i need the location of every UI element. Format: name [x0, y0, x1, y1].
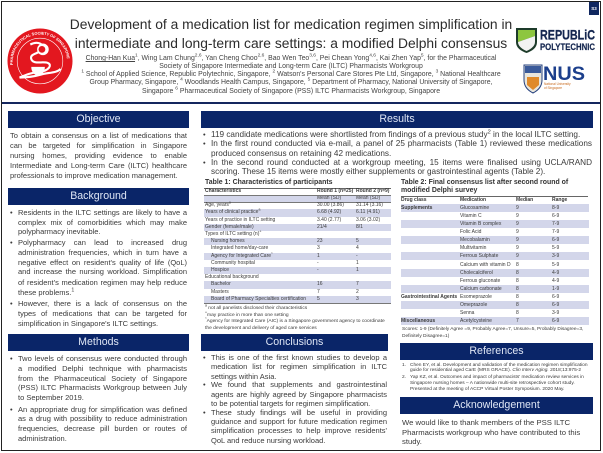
acknowledgement text: study. — [402, 437, 422, 446]
heading: background: Background — [70, 190, 127, 202]
table 1: characteristics of participants: 31.14 (3.16) — [356, 202, 383, 208]
objective text — [10, 131, 187, 180]
table 1: characteristics of participants: 3 — [356, 296, 359, 302]
conclusions bullets: simplification processes to help improve residents' — [211, 426, 387, 435]
table 2: final consensus list: Omeprazole — [460, 302, 487, 308]
table 2: final consensus list: Ferrous Sulphate — [460, 253, 498, 259]
table 2: final consensus list: 9 — [516, 237, 519, 243]
table 1: characteristics of participants: 6.68 (4.92) — [317, 209, 341, 215]
table 1: characteristics of participants: 4 — [356, 245, 359, 251]
panel: results — [201, 111, 593, 176]
panel: results: • — [203, 130, 206, 139]
conclusions bullets: guidance and support for future medication regimen — [211, 417, 387, 426]
table 2: final consensus list: Calcium carbonate — [460, 286, 502, 292]
heading: methods — [8, 334, 189, 350]
table 2: final consensus list: Gastrointestinal Agents — [401, 294, 457, 300]
table 1: characteristics of participants: Age, yearsa — [205, 201, 231, 208]
table 2: final consensus list: 6-9 — [552, 237, 559, 243]
table 1: characteristics of participants: Years of clinical practicea — [205, 208, 260, 215]
logo: NUS — [524, 64, 585, 94]
table 1: characteristics of participants: 1 — [356, 260, 359, 266]
conclusions bullets: These study findings will be useful in providing — [211, 408, 387, 417]
table 1: characteristics of participants: 16 — [317, 281, 323, 287]
table 1: characteristics of participants: Round 1 (n=25) — [317, 188, 353, 194]
table 2: final consensus list: 6-9 — [552, 318, 559, 324]
background bullets: and increase the nursing workload. Simplification — [18, 267, 187, 276]
conclusions bullets: QoL and reduce nursing workload. — [211, 436, 325, 445]
table 1 notes — [205, 303, 385, 330]
panel: background: • — [10, 299, 13, 308]
heading: conclusions: Conclusions — [266, 336, 323, 348]
acknowledgement text: We would like to thank members of the PSS ILTC — [402, 418, 570, 427]
table 2: final consensus list: Folic Acid — [460, 229, 481, 235]
panel: methods: • — [10, 405, 13, 414]
conclusions bullets — [203, 353, 387, 445]
conclusions bullets: to be potential targets for regimen simplification. — [211, 399, 370, 408]
table 1 notes: the development and delivery of aged care services — [205, 326, 317, 330]
objective text: nursing homes, providing evidence to enable — [10, 151, 187, 160]
table 1: characteristics of participants: Bachelor — [211, 281, 231, 287]
background bullets: polypharmacy inevitable. — [18, 227, 101, 236]
table 2: final consensus list: 9 — [516, 245, 519, 251]
background bullets: negative effect on resident's quality of life (QoL) — [18, 258, 187, 267]
table 1: characteristics of participants: Integrated home/day-care — [211, 245, 268, 251]
background bullets: complex mix of comorbidities which may make — [18, 218, 187, 227]
table 2: final consensus list: 3-9 — [552, 253, 559, 259]
table 2: final consensus list: Calcium with vitamin D — [460, 262, 511, 268]
reference list: guide for residential aged CarE (MRS GRACE). Clin Interv Aging. 2018;13:975-2 — [410, 368, 581, 373]
table 2: final consensus list: 8-9 — [552, 205, 559, 211]
heading: results: Results — [379, 113, 415, 125]
results bullets: 119 candidate medications were shortlisted from findings of a previous study2 in the local ILTC setting. — [211, 129, 580, 139]
table 1 notes: ^ Agency for Integrated Care (AIC) is a Singapore government agency to coordinate — [205, 316, 385, 324]
methods bullets: as a drug with possibility to reduce administration — [18, 414, 187, 423]
table 2: final consensus list: 7-9 — [552, 229, 559, 235]
objective text: professionals to improve medication management. — [10, 170, 178, 180]
logo: Pharmaceutical Society of Singapore: PHARMACEUTICAL SOCIETY OF SINGAPORE — [10, 32, 70, 65]
table 2: final consensus list: Range — [552, 197, 567, 203]
heading: objective — [8, 111, 189, 128]
table 1: characteristics of participants: Masters — [211, 289, 229, 295]
results bullets: produced consensus on retaining 42 medications. — [211, 148, 391, 158]
reference list: Presented at the meeting of ACCP Virtual Poster Symposium. 2020 May. — [410, 386, 564, 392]
table 2: final consensus list: 6-9 — [552, 294, 559, 300]
header divider — [2, 102, 600, 104]
reference list: Yap KZ, et al. Outcomes and impact of pharmacists' medication review services in — [410, 375, 584, 380]
table 2: final consensus list: 5-9 — [552, 262, 559, 268]
table 2: final consensus list: 8 — [516, 302, 519, 308]
table 2: final consensus list: 6-9 — [552, 302, 559, 308]
table 2 title: Table 2: Final consensus list after second round of — [401, 179, 568, 186]
acknowledgement text: Pharmacists workgroup who have contributed to this — [402, 428, 580, 437]
logo: NUS: NUS — [543, 64, 585, 85]
table 1: characteristics of participants: 3 — [317, 245, 320, 251]
methods bullets: Two levels of consensus were conducted through — [18, 354, 187, 363]
conclusions bullets: settings within Asia. — [211, 372, 276, 381]
heading: references — [400, 343, 593, 360]
badge: S3 — [589, 2, 599, 15]
table 2: final consensus list: 8 — [516, 278, 519, 284]
table 2 title: modified Delphi survey — [401, 187, 477, 194]
authors and affiliations: Chong-Han Kua1, Wing Lam Chung2,6, Yan Cheng Choo2,6, Bao Wen Teo3,6, Pei Chean Yong4,6, Kai Zhen Yap5, for the Pharmaceutical — [86, 54, 496, 62]
table 2: final consensus list: Multivitamin — [460, 245, 486, 251]
table 1: characteristics of participants: Hospice — [211, 267, 229, 273]
table 1: characteristics of participants: 21/4 — [317, 224, 327, 230]
table 1: characteristics of participants: 23 — [317, 238, 323, 244]
conclusions bullets: medication list for regimen simplification in ILTC — [211, 362, 387, 371]
panel: conclusions — [201, 334, 388, 445]
table 1 notes: a not all panelists disclosed their characteristics — [205, 303, 307, 310]
table 1: characteristics of participants: Community hospital — [211, 260, 255, 266]
panel: background: • — [10, 208, 13, 217]
table 1: characteristics of participants: Board of Pharmacy Specialties certification — [211, 296, 306, 302]
table 2: final consensus list: Drug class — [401, 197, 427, 203]
table 1: characteristics of participants: 3.40 (2.77) — [317, 217, 341, 223]
panel: methods — [8, 334, 189, 443]
table 1: characteristics of participants: 5 — [356, 238, 359, 244]
reference list: Chen EY, et al. Development and validation of the medication regimen simplification — [410, 363, 588, 368]
heading: objective: Objective — [76, 113, 121, 125]
table 2: final consensus list: Median — [516, 197, 533, 203]
table 2: final consensus list: 9 — [516, 213, 519, 219]
title: intermediate and long-term care settings: a modified Delphi consensus — [75, 35, 507, 51]
background bullets: simplification in Singapore's ILTC settings. — [18, 319, 158, 328]
objective text: Intermediate and Long-term Care (ILTC) healthcare — [10, 161, 187, 170]
heading: references: References — [469, 345, 524, 357]
panel: background — [8, 188, 189, 328]
table 2: final consensus list: 9 — [516, 253, 519, 259]
title: Development of a medication list for medication regimen simplification in — [70, 16, 512, 32]
table 2: final consensus list: 8 — [516, 310, 519, 316]
table 1: characteristics of participants: 2 — [356, 289, 359, 295]
heading: acknowledgement: Acknowledgement — [453, 399, 540, 411]
table 1: characteristics of participants: Mean (SD) — [356, 195, 380, 201]
table 2: final consensus list: 7-9 — [552, 221, 559, 227]
table 2: final consensus list: Cholecalciferol — [460, 270, 493, 276]
authors and affiliations: Group Pharmacy, Singapore, 4 Woodlands Health Campus, Singapore, 5 Department of Pharmacy, National University of Singapore, — [90, 78, 492, 86]
table 2: final consensus list: 6-9 — [552, 213, 559, 219]
conclusions bullets: We found that supplements and gastrointestinal — [211, 380, 387, 389]
objective text: can be targeted for simplification in Singapore — [10, 141, 187, 150]
table 2: final consensus list: 9 — [516, 205, 519, 211]
table 1: characteristics of participants: Types of ILTC setting (n)+ — [205, 229, 261, 237]
methods bullets: a modified Delphi technique with pharmacists — [18, 364, 187, 373]
background bullets: types of medications that can be targeted for — [18, 309, 187, 318]
table 2: final consensus list: 4-9 — [552, 270, 559, 276]
table 1: characteristics of participants: 6.11 (4.91) — [356, 209, 380, 215]
table 1: characteristics of participants: 1 — [317, 253, 320, 259]
table 1: characteristics of participants: 5 — [317, 296, 320, 302]
methods bullets: (PSS) ILTC Pharmacists Workgroup between July — [18, 383, 187, 392]
reference list: 1. — [402, 363, 406, 368]
table 2: final consensus list: 8 — [516, 262, 519, 268]
table 1: characteristics of participants: 30.00 (3.86) — [317, 202, 344, 208]
table 2: final consensus list: Senna — [460, 310, 474, 316]
table 2: final consensus list: 8 — [516, 270, 519, 276]
table 1: characteristics of participants: Years of practice in ILTC setting — [205, 217, 275, 223]
panel: background: • — [10, 238, 13, 247]
background bullets: of resident's medication regimen may help reduce — [18, 278, 187, 287]
panel: conclusions: • — [203, 353, 206, 362]
logo: NUS: of Singapore — [544, 86, 562, 90]
reference list: 2. — [402, 375, 406, 380]
authors and affiliations: Singapore 6 Pharmaceutical Society of Singapore (PSS) ILTC Pharmacists Workgroup, Singapore — [142, 87, 440, 95]
table 2: final consensus list: 3-9 — [552, 310, 559, 316]
table 1: characteristics of participants — [204, 178, 391, 330]
title — [70, 16, 512, 51]
table 1: characteristics of participants: Agency for Integrated Care^ — [211, 251, 273, 259]
methods bullets — [10, 354, 187, 443]
panel: conclusions: • — [203, 408, 206, 417]
panel: conclusions: • — [203, 380, 206, 389]
table 2 notes: Definitely Disagree=1) — [402, 334, 449, 339]
table 1: characteristics of participants: Round 2 (n=9) — [356, 188, 389, 194]
table 2: final consensus list: 8 — [516, 294, 519, 300]
table 2: final consensus list: 4-9 — [552, 278, 559, 284]
authors and affiliations: 1 School of Applied Science, Republic Polytechnic, Singapore, 2 Watson's Personal Care Stores Pte Ltd, Singapore, 3 National Healthcare — [81, 70, 501, 78]
table 2: final consensus list: Supplements — [401, 205, 432, 211]
table 2 notes: Scores: 1-9 (Definitely Agree =9, Probably Agree=7, Unsure=5, Probably Disagree=3, — [402, 327, 583, 332]
table 1: characteristics of participants: 7 — [317, 289, 320, 295]
table 2: final consensus list: Vitamin C — [460, 213, 482, 219]
authors and affiliations: Society of Singapore Intermediate and Long-term Care (ILTC) Pharmacists Workgroup — [159, 63, 423, 70]
table 1: characteristics of participants: 3.06 (3.02) — [356, 217, 380, 223]
panel: objective — [8, 111, 189, 180]
table 1: characteristics of participants: - — [356, 253, 358, 259]
conclusions bullets: agents are highly agreed by Singapore pharmacists — [211, 390, 387, 399]
background bullets: Residents in the ILTC settings are likely to have a — [18, 208, 187, 217]
table 1: characteristics of participants: - — [317, 260, 319, 266]
results bullets: scoring. These 15 items were mostly either supplements or gastrointestinal agents (Table 2). — [211, 167, 545, 176]
badge: S3: S3 — [591, 6, 597, 11]
table 2: final consensus list: 9 — [516, 229, 519, 235]
panel: results: • — [203, 139, 206, 148]
table 2: final consensus list: Acetylcysteine — [460, 318, 492, 324]
table 1: characteristics of participants: 1 — [356, 267, 359, 273]
objective text: To obtain a consensus on a list of medications that — [10, 131, 187, 140]
table 1: characteristics of participants: 8/1 — [356, 224, 363, 230]
results bullets — [203, 129, 592, 176]
background bullets: However, there is a lack of consensus on the — [18, 299, 187, 308]
reference list: Singapore nursing homes – A nationwide multi-site retrospective cohort study. — [410, 380, 575, 386]
table 1: characteristics of participants: Gender (female/male) — [205, 224, 254, 230]
panel: acknowledgement — [400, 397, 593, 446]
table 2: final consensus list: Mecobalamin — [460, 237, 490, 243]
table 1: characteristics of participants: Mean (SD) — [317, 195, 341, 201]
methods bullets: from the Pharmaceutical Society of Singapore — [18, 374, 187, 383]
table 2 title — [401, 178, 568, 194]
acknowledgement text — [402, 418, 580, 446]
table 1: characteristics of participants: 7 — [356, 281, 359, 287]
table 2: final consensus list: Esomeprazole — [460, 294, 492, 300]
heading: acknowledgement — [400, 397, 593, 414]
heading: background — [8, 188, 189, 204]
table 2: final consensus list: Ferrous gluconate — [460, 278, 500, 284]
background bullets: administration frequencies, which in turn have a — [18, 248, 187, 257]
methods bullets: An appropriate drug for simplification was defined — [18, 405, 187, 414]
table 2: final consensus list: 7 — [516, 318, 519, 324]
methods bullets: administration. — [18, 434, 67, 443]
background bullets — [10, 208, 187, 328]
table 2: final consensus list: Vitamin B complex — [460, 221, 501, 227]
methods bullets: frequencies, decrease pill burden or routes of — [18, 424, 187, 433]
methods bullets: to September 2019. — [18, 393, 84, 402]
conclusions bullets: This is one of the first known studies to develop a — [211, 353, 387, 362]
table 2: final consensus list: Medication — [460, 197, 486, 203]
heading: results — [201, 111, 593, 128]
reference list — [402, 362, 588, 392]
panel: results: • — [203, 158, 206, 167]
logo: Republic Polytechnic — [516, 28, 595, 53]
logo: Pharmaceutical Society of Singapore — [8, 28, 72, 94]
table 1: characteristics of participants: Nursing homes — [211, 238, 245, 244]
table 2: final consensus list — [401, 178, 589, 339]
table 2: final consensus list: Miscellaneous — [401, 318, 435, 324]
table 2 notes — [402, 326, 583, 339]
table 1 notes: + may practice in more than one setting — [205, 310, 289, 318]
table 1 title: Table 1: Characteristics of participants — [205, 179, 332, 186]
table 1: characteristics of participants: Educational background — [205, 274, 259, 280]
table 1: characteristics of participants: Characteristics — [205, 188, 241, 194]
heading: conclusions — [201, 334, 388, 350]
authors and affiliations — [81, 54, 501, 95]
panel: methods: • — [10, 354, 13, 363]
table 2: final consensus list: 1-9 — [552, 286, 559, 292]
logo: NUS: National University — [544, 82, 571, 86]
table 2: final consensus list: Glucosamine — [460, 205, 489, 211]
table 1: characteristics of participants: - — [317, 267, 319, 273]
table 2: final consensus list: 5-9 — [552, 245, 559, 251]
background bullets: these problems.1 — [18, 287, 74, 297]
table 2: final consensus list: 9 — [516, 221, 519, 227]
heading: methods: Methods — [78, 336, 119, 348]
table 2: final consensus list: 8 — [516, 286, 519, 292]
background bullets: Polypharmacy can lead to increased drug — [18, 238, 187, 247]
